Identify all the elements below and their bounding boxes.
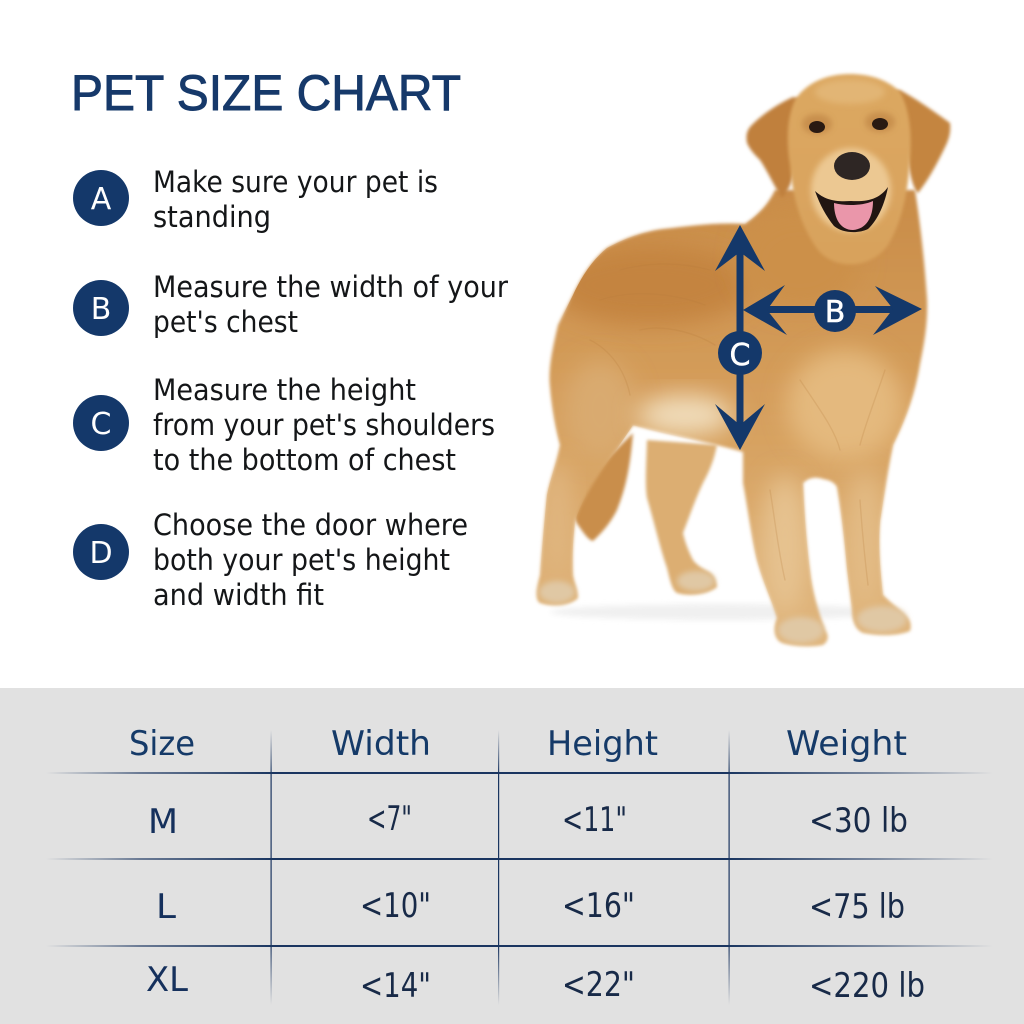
face (788, 74, 911, 264)
table header: Size (129, 724, 195, 764)
step A: Make sure your pet is (153, 165, 438, 199)
row XL: <14" (360, 966, 431, 1006)
table header: Weight (786, 724, 907, 764)
step B: Measure the width of your (153, 270, 508, 304)
row L: <10" (360, 886, 431, 926)
row XL (146, 960, 925, 1006)
table grid (46, 730, 993, 1005)
eyes (809, 121, 825, 133)
row XL: XL (146, 960, 188, 1000)
step D (73, 508, 468, 612)
fur shading (541, 210, 903, 615)
row L: <75 lb (809, 887, 905, 927)
arrow B: horizontal measurement: B (825, 295, 845, 330)
step B: pet's chest (153, 305, 298, 339)
table background (0, 688, 1024, 1024)
table header: Height (547, 724, 658, 764)
far hind leg (646, 440, 717, 595)
step A (73, 165, 438, 234)
muzzle (811, 148, 891, 232)
step C: C (91, 407, 111, 442)
step B: B (91, 292, 111, 327)
step C: to the bottom of chest (153, 443, 456, 477)
size table (0, 688, 1024, 1024)
step C: Measure the height (153, 373, 416, 407)
paws (539, 571, 907, 643)
left ear (746, 97, 807, 198)
step A: A (91, 182, 112, 217)
row M (148, 799, 908, 842)
step D: and width fit (153, 578, 324, 612)
body (537, 190, 927, 646)
step C: from your pet's shoulders (153, 408, 495, 442)
row L: <16" (562, 886, 635, 926)
row M: <30 lb (809, 801, 908, 841)
eye shadows (802, 112, 895, 134)
forehead highlight (815, 80, 885, 104)
mouth (815, 187, 888, 232)
table header: Width (331, 724, 431, 764)
step A: standing (153, 200, 271, 234)
step D: D (89, 536, 113, 571)
dog illustration (537, 74, 950, 646)
ground shadow (550, 604, 890, 620)
step D: both your pet's height (153, 543, 450, 577)
tongue (834, 201, 873, 230)
row L (156, 886, 905, 927)
row XL: <22" (562, 965, 635, 1005)
step C (73, 373, 495, 477)
row XL: <220 lb (809, 966, 925, 1006)
row M: <7" (367, 799, 412, 839)
row M: M (148, 802, 178, 842)
right ear (888, 90, 950, 193)
arrow B: horizontal measurement (743, 285, 922, 335)
table header (129, 724, 907, 764)
row L: L (156, 887, 176, 927)
arrow C: vertical measurement (715, 225, 765, 450)
step B (73, 270, 508, 339)
row M: <11" (562, 800, 627, 840)
fur strokes (590, 264, 885, 585)
nose (834, 152, 870, 180)
title: PET SIZE CHART (71, 65, 461, 121)
arrow C: vertical measurement: C (730, 338, 750, 373)
step D: Choose the door where (153, 508, 468, 542)
tail (574, 433, 633, 541)
head (746, 74, 950, 264)
